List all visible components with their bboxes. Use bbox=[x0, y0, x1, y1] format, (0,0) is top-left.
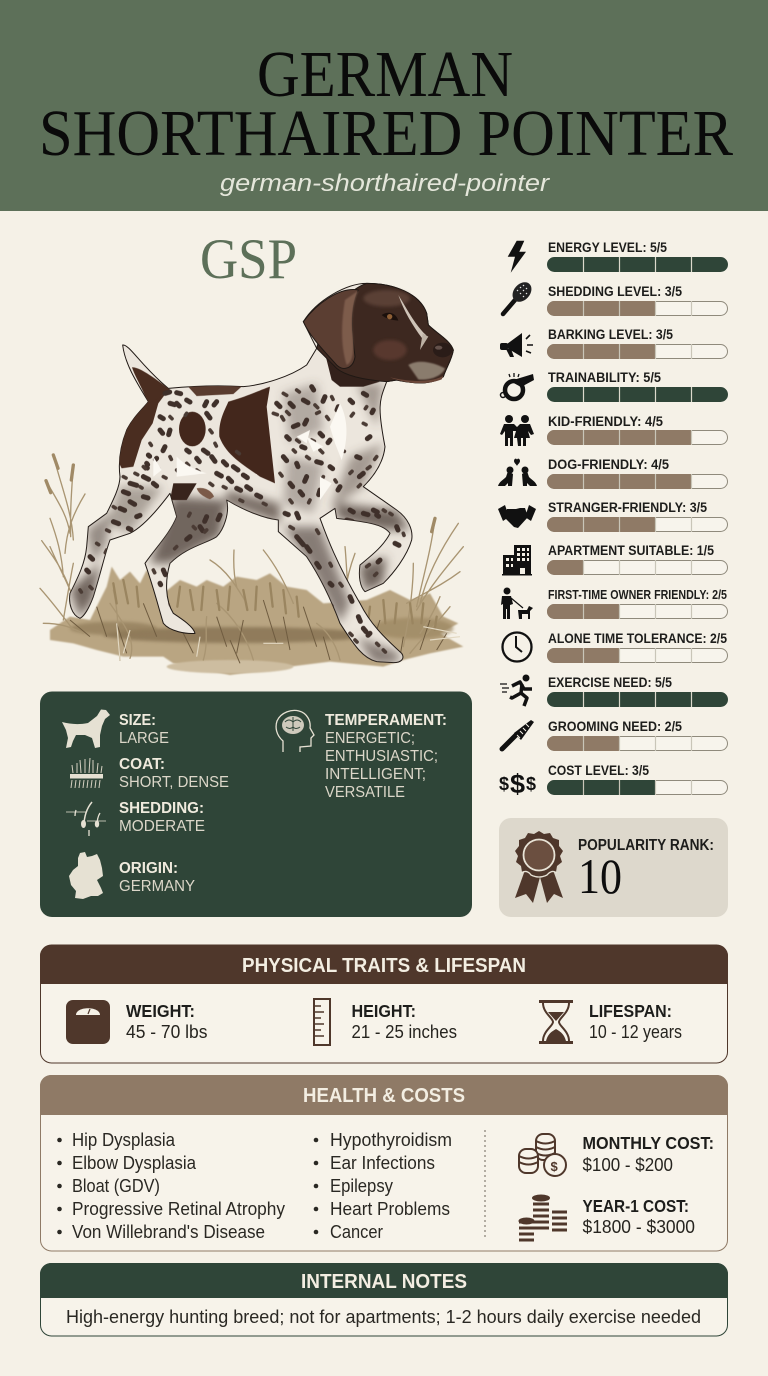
stat: monthly cost bbox=[582, 1133, 714, 1175]
icon: ruler bbox=[314, 999, 330, 1045]
icon: two children bbox=[500, 415, 534, 446]
rating: shedding level: SHEDDING LEVEL: 3/5 bbox=[548, 284, 682, 299]
icon: weighing scale bbox=[66, 1000, 110, 1044]
stat: monthly cost: MONTHLY COST: bbox=[582, 1133, 714, 1153]
grass bbox=[40, 455, 463, 675]
title bbox=[39, 38, 733, 170]
fact: shedding: SHEDDING: bbox=[119, 800, 204, 817]
list: health conditions column two bbox=[314, 1129, 452, 1242]
heading: HEALTH & COSTS bbox=[303, 1085, 465, 1107]
rating: grooming need bbox=[502, 719, 728, 751]
icon: award ribbon bbox=[515, 831, 563, 903]
icon: runner bbox=[500, 674, 532, 706]
panel: popularity rank bbox=[499, 818, 728, 917]
rating: first-time owner friendly: FIRST-TIME OWNER FRIENDLY: 2/5 bbox=[548, 588, 727, 602]
stat: monthly cost: $100 - $200 bbox=[582, 1154, 673, 1175]
illustration: dog running in grass bbox=[40, 283, 463, 675]
icon: coins with dollar: $ bbox=[550, 1159, 558, 1174]
ear bbox=[303, 290, 358, 368]
stat: weight: 45 - 70 lbs bbox=[126, 1021, 208, 1042]
icon: whistle bbox=[500, 373, 534, 399]
icon: map of Germany bbox=[69, 852, 103, 899]
icon: apartment building bbox=[502, 545, 532, 576]
fact: origin: ORIGIN: bbox=[119, 860, 178, 877]
rating: cost level bbox=[499, 763, 728, 799]
list: health conditions column one: Hip Dysplasia bbox=[72, 1129, 176, 1150]
rating: trainability: TRAINABILITY: 5/5 bbox=[548, 370, 661, 385]
rating bars bbox=[498, 240, 728, 799]
list: health conditions column two: Epilepsy bbox=[330, 1175, 394, 1196]
fact: origin: GERMANY bbox=[119, 878, 195, 895]
fact: shedding: MODERATE bbox=[119, 818, 205, 835]
stat: year-1 cost: YEAR-1 COST: bbox=[582, 1196, 689, 1216]
fact: temperament bbox=[325, 712, 447, 801]
rating: kid-friendly: KID-FRIENDLY: 4/5 bbox=[548, 414, 663, 429]
rating: apartment suitable bbox=[502, 543, 728, 576]
icon: dog silhouette bbox=[62, 710, 110, 748]
icon: person walking dog bbox=[501, 588, 533, 619]
icon: shedding hairs bbox=[66, 802, 106, 836]
icon: brain in head bbox=[276, 710, 314, 752]
rating: barking level: BARKING LEVEL: 3/5 bbox=[548, 327, 673, 342]
icon: dollar signs: $ bbox=[510, 769, 525, 799]
panel: health and costs bbox=[40, 1075, 728, 1251]
stat: year-1 cost bbox=[582, 1196, 695, 1237]
stat: weight bbox=[126, 1001, 208, 1042]
heading: PHYSICAL TRAITS & LIFESPAN bbox=[242, 955, 526, 977]
list: health conditions column one bbox=[57, 1129, 286, 1242]
popularity value: 10 bbox=[578, 848, 622, 904]
heading: INTERNAL NOTES bbox=[301, 1271, 467, 1293]
rating: stranger-friendly bbox=[498, 500, 728, 532]
rating: trainability bbox=[500, 370, 728, 402]
rating: barking level bbox=[500, 327, 728, 359]
dog body bbox=[70, 283, 453, 663]
fact: coat bbox=[119, 756, 229, 791]
rating: cost level: COST LEVEL: 3/5 bbox=[548, 763, 649, 778]
stat: lifespan bbox=[589, 1001, 682, 1042]
icon: handshake bbox=[498, 505, 536, 528]
rating: energy level: ENERGY LEVEL: 5/5 bbox=[548, 240, 667, 255]
rating: alone time tolerance bbox=[502, 631, 728, 663]
fact: size: LARGE bbox=[119, 730, 169, 747]
fact: coat: COAT: bbox=[119, 756, 165, 773]
fact: temperament: ENERGETIC; bbox=[325, 730, 415, 747]
list: health conditions column two: Hypothyroidism bbox=[330, 1129, 452, 1150]
list: health conditions column two: Ear Infections bbox=[330, 1152, 435, 1173]
note text: High-energy hunting breed; not for apartments; 1-2 hours daily exercise needed bbox=[66, 1306, 701, 1327]
stat: height: 21 - 25 inches bbox=[352, 1021, 457, 1042]
rating: kid-friendly bbox=[500, 414, 728, 446]
abbreviation heading: GSP bbox=[200, 228, 297, 291]
rating: apartment suitable: APARTMENT SUITABLE: 1/5 bbox=[548, 543, 714, 558]
stat: lifespan: LIFESPAN: bbox=[589, 1001, 672, 1021]
fact: temperament: VERSATILE bbox=[325, 784, 405, 801]
fact: size bbox=[119, 712, 169, 747]
header banner bbox=[0, 0, 768, 211]
icon: clock bbox=[502, 632, 532, 662]
rating: grooming need: GROOMING NEED: 2/5 bbox=[548, 719, 682, 734]
rating: energy level bbox=[508, 240, 728, 273]
icon: dollar signs bbox=[499, 769, 536, 799]
subtitle: german-shorthaired-pointer bbox=[220, 170, 550, 197]
ticking spots bbox=[87, 387, 399, 635]
list: health conditions column one: Progressive Retinal Atrophy bbox=[72, 1198, 286, 1219]
list: health conditions column one: Von Willebrand's Disease bbox=[72, 1221, 265, 1242]
rating: stranger-friendly: STRANGER-FRIENDLY: 3/5 bbox=[548, 500, 707, 515]
stat: height: HEIGHT: bbox=[352, 1001, 416, 1021]
icon: comb bbox=[502, 720, 534, 749]
head bbox=[317, 283, 453, 383]
dark patches bbox=[219, 387, 275, 483]
stat: height bbox=[352, 1001, 457, 1042]
icon: hourglass bbox=[539, 1000, 573, 1044]
fact: coat: SHORT, DENSE bbox=[119, 774, 229, 791]
panel: internal notes bbox=[40, 1263, 728, 1336]
rating: dog-friendly: DOG-FRIENDLY: 4/5 bbox=[548, 457, 669, 472]
panel: breed facts bbox=[40, 692, 472, 917]
rating: first-time owner friendly bbox=[501, 588, 728, 619]
white chest highlights bbox=[153, 403, 346, 500]
rating: exercise need: EXERCISE NEED: 5/5 bbox=[548, 675, 672, 690]
panel: physical traits and lifespan bbox=[40, 945, 728, 1063]
coat shading and markings clipped to the body bbox=[70, 347, 410, 663]
stat: year-1 cost: $1800 - $3000 bbox=[582, 1216, 695, 1237]
dark neck under ear bbox=[326, 358, 380, 387]
fact: size: SIZE: bbox=[119, 712, 156, 729]
rating: exercise need bbox=[500, 674, 728, 707]
icon: dollar signs: $ bbox=[499, 774, 509, 794]
icon: brush bbox=[503, 278, 535, 314]
fact: shedding bbox=[119, 800, 205, 835]
icon: coins with dollar bbox=[519, 1134, 566, 1176]
list: health conditions column one: Bloat (GDV) bbox=[72, 1175, 160, 1196]
rating: alone time tolerance: ALONE TIME TOLERANCE: 2/5 bbox=[548, 631, 727, 646]
fact: temperament: ENTHUSIASTIC; bbox=[325, 748, 438, 765]
icon: lightning bolt bbox=[508, 241, 526, 273]
rating: shedding level bbox=[503, 278, 728, 316]
list: health conditions column two: Cancer bbox=[330, 1221, 383, 1242]
list: health conditions column one: Elbow Dysplasia bbox=[72, 1152, 197, 1173]
icon: coin stacks bbox=[518, 1194, 567, 1240]
soft grey shading bbox=[70, 383, 410, 663]
list: health conditions column two: Heart Problems bbox=[330, 1198, 450, 1219]
fact: origin bbox=[119, 860, 195, 895]
icon: coat bbox=[70, 758, 103, 788]
fact: temperament: INTELLIGENT; bbox=[325, 766, 426, 783]
rating: dog-friendly bbox=[498, 457, 728, 489]
popularity label: POPULARITY RANK: bbox=[578, 837, 714, 854]
title: GERMAN bbox=[257, 38, 513, 111]
icon: megaphone bbox=[500, 333, 533, 357]
stat: weight: WEIGHT: bbox=[126, 1001, 195, 1021]
stat: lifespan: 10 - 12 years bbox=[589, 1021, 682, 1042]
fact: temperament: TEMPERAMENT: bbox=[325, 712, 447, 729]
icon: two dogs with heart bbox=[498, 459, 537, 486]
icon: dollar signs: $ bbox=[526, 774, 536, 794]
